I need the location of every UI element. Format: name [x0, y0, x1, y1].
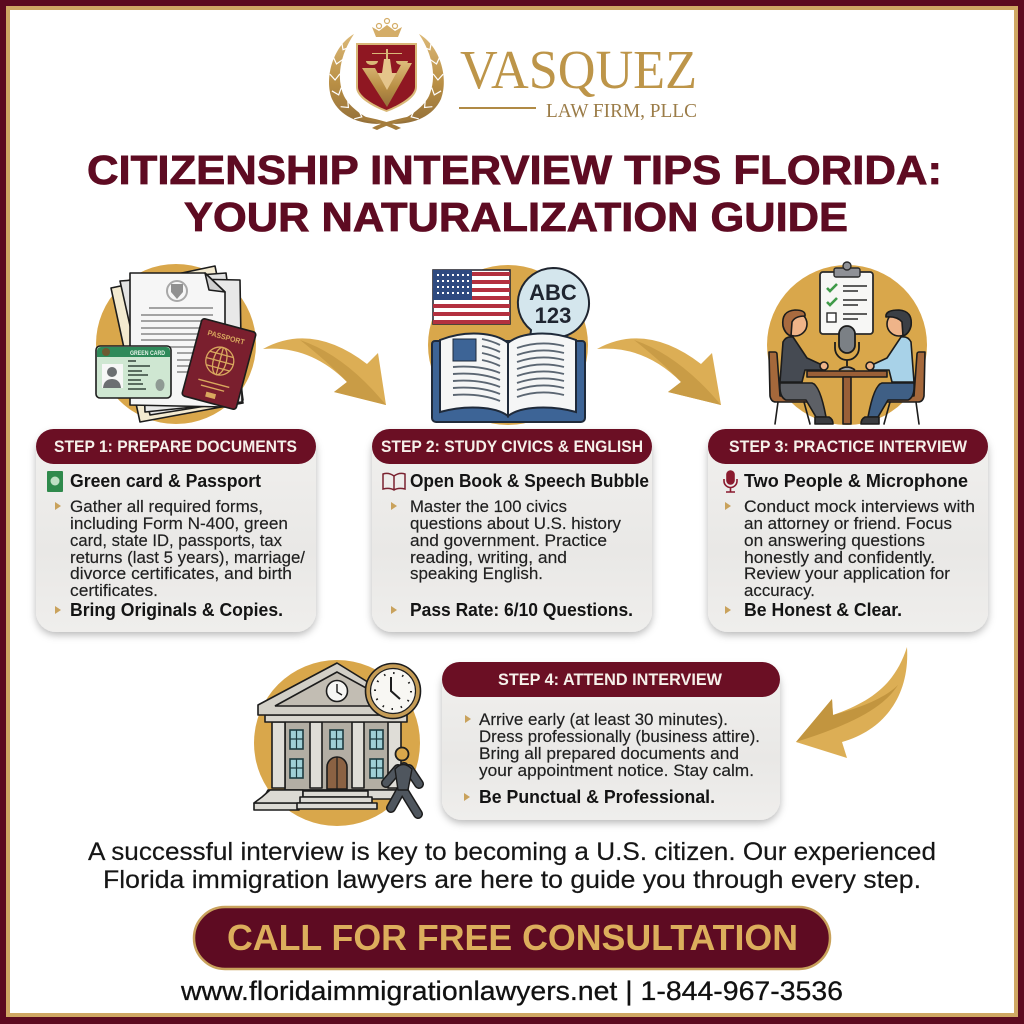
step 3 header: STEP 3: PRACTICE INTERVIEW [729, 437, 968, 456]
closing message: A successful interview is key to becoming a U.S. citizen. Our experienced [88, 838, 936, 866]
icon: shield with V [356, 43, 417, 112]
step 1 header: STEP 1: PREPARE DOCUMENTS [54, 437, 297, 456]
panel: step 1 [36, 429, 316, 632]
step 3 body: honestly and confidently. [744, 548, 935, 567]
step 2 body: speaking English. [410, 564, 543, 583]
icon: speech bubble ABC 123: 123 [535, 303, 571, 328]
step 3 takeaway: Be Honest & Clear. [744, 599, 902, 620]
call to action button [194, 907, 830, 969]
arrow: step 3 to step 4 [796, 647, 907, 758]
icon: laurel wreath [329, 34, 444, 130]
step 1 body: card, state ID, passports, tax [70, 531, 282, 550]
logo wordmark: VASQUEZ [460, 39, 697, 100]
panel: step 3 [708, 429, 988, 632]
illustration: mock interview [767, 262, 927, 425]
icon: right person in chair [861, 310, 925, 424]
icon: speech bubble ABC 123: ABC [529, 280, 577, 305]
step 4 body [465, 710, 760, 780]
arrow: step 1 to step 2 [263, 338, 386, 405]
icon: passport: PASSPORT [207, 328, 246, 347]
step 2 body: questions about U.S. history [410, 514, 621, 533]
step 1 body: Gather all required forms, [70, 497, 263, 516]
icon: open book outline [383, 473, 405, 490]
step 3 body: an attorney or friend. Focus [744, 514, 952, 533]
closing message: Florida immigration lawyers are here to guide you through every step. [103, 866, 921, 894]
icon: walking person [386, 748, 419, 814]
icon: microphone [724, 471, 737, 492]
step 1 body: certificates. [70, 581, 158, 600]
arrow: step 2 to step 3 [597, 338, 721, 405]
step 3 header [708, 429, 988, 464]
step 2 header [372, 429, 652, 464]
title: CITIZENSHIP INTERVIEW TIPS FLORIDA: [87, 147, 942, 193]
step 3 body: accuracy. [744, 581, 815, 600]
closing message [88, 838, 936, 894]
step 3 body: Review your application for [744, 564, 950, 583]
step 1 takeaway: Bring Originals & Copies. [70, 599, 283, 620]
website and phone: www.floridaimmigrationlawyers.net | 1-844-967-3536 [180, 976, 843, 1006]
title: YOUR NATURALIZATION GUIDE [184, 194, 848, 240]
step 2 header: STEP 2: STUDY CIVICS & ENGLISH [381, 437, 643, 456]
icon: green card [96, 346, 171, 398]
icon: green passport [47, 471, 63, 492]
icon: passport [182, 318, 256, 410]
panel: step 4 [442, 662, 780, 820]
logo subtitle: LAW FIRM, PLLC [546, 100, 697, 122]
step 4 body: your appointment notice. Stay calm. [479, 761, 754, 780]
icon: American flag [433, 270, 510, 324]
step 1 body: including Form N-400, green [70, 514, 288, 533]
icon: speech bubble ABC 123 [518, 268, 589, 338]
panel: step 2 [372, 429, 652, 632]
step 3 body [725, 497, 975, 600]
step 4 takeaway: Be Punctual & Professional. [479, 786, 715, 807]
icon: green card: GREEN CARD [130, 351, 166, 357]
step 2 body: and government. Practice [410, 531, 607, 550]
step 2 body [391, 497, 621, 583]
step 1 body: returns (last 5 years), marriage/ [70, 548, 305, 567]
step 1 heading: Green card & Passport [70, 470, 261, 491]
step 3 body: on answering questions [744, 531, 925, 550]
step 4 header [442, 662, 780, 697]
step 4 body: Bring all prepared documents and [479, 744, 739, 763]
step 1 body [55, 497, 305, 600]
icon: crown [372, 18, 402, 37]
step 4 body: Dress professionally (business attire). [479, 727, 760, 746]
logo: Vasquez Law Firm [329, 18, 697, 130]
icon: clipboard checklist [820, 262, 873, 334]
call to action button: CALL FOR FREE CONSULTATION [227, 917, 798, 958]
illustration: flag, book and speech bubble [428, 265, 589, 425]
illustration: courthouse, clock and walking person [254, 660, 420, 826]
step 1 header [36, 429, 316, 464]
step 2 body: reading, writing, and [410, 548, 567, 567]
title [87, 147, 942, 240]
step 2 takeaway: Pass Rate: 6/10 Questions. [410, 599, 633, 620]
icon: left person in chair [769, 310, 833, 424]
illustration: documents, green card and passport [96, 264, 256, 424]
icon: microphone and table [807, 326, 887, 424]
icon: large clock [366, 664, 420, 718]
step 3 heading: Two People & Microphone [744, 470, 968, 491]
step 4 header: STEP 4: ATTEND INTERVIEW [498, 670, 723, 689]
step 2 body: Master the 100 civics [410, 497, 567, 516]
step 1 body: divorce certificates, and birth [70, 564, 292, 583]
step 4 body: Arrive early (at least 30 minutes). [479, 710, 728, 729]
step 2 heading: Open Book & Speech Bubble [410, 470, 649, 491]
icon: open book [432, 334, 585, 422]
step 3 body: Conduct mock interviews with [744, 497, 975, 516]
